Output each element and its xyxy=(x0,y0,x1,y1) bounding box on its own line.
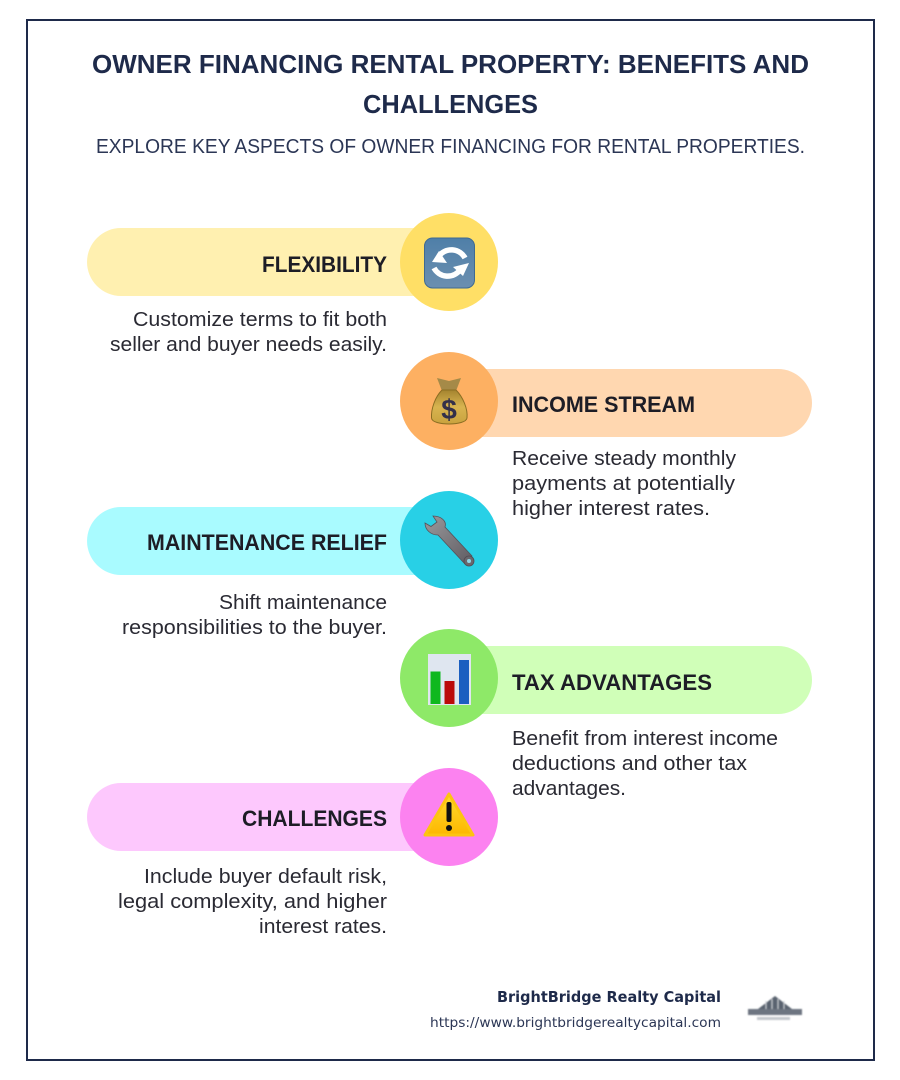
icon: money bag: $ xyxy=(441,394,457,425)
maintenance relief description: responsibilities to the buyer. xyxy=(122,617,387,639)
tax advantages description: advantages. xyxy=(512,778,626,800)
challenges description: interest rates. xyxy=(259,916,387,938)
company name: BrightBridge Realty Capital xyxy=(497,988,721,1006)
flexibility heading: FLEXIBILITY xyxy=(262,252,387,277)
income stream description: higher interest rates. xyxy=(512,498,710,520)
maintenance relief description: Shift maintenance xyxy=(219,592,387,614)
panel: flexibility xyxy=(87,213,498,356)
income stream icon circle xyxy=(400,352,498,450)
challenges heading: CHALLENGES xyxy=(242,806,387,831)
challenges description xyxy=(118,866,387,938)
tax advantages icon circle xyxy=(400,629,498,727)
flexibility description: seller and buyer needs easily. xyxy=(110,334,387,356)
flexibility pill xyxy=(87,228,449,296)
icon: arrows button xyxy=(424,238,474,288)
tax advantages description: Benefit from interest income xyxy=(512,728,778,750)
panel: income stream xyxy=(400,352,812,520)
tax advantages description xyxy=(512,728,778,800)
challenges description: Include buyer default risk, xyxy=(144,866,387,888)
title xyxy=(92,49,809,119)
footer brand xyxy=(430,988,802,1031)
flexibility description xyxy=(110,309,387,356)
title: CHALLENGES xyxy=(363,89,538,119)
income stream heading: INCOME STREAM xyxy=(512,392,695,417)
tax advantages heading: TAX ADVANTAGES xyxy=(512,670,712,695)
income stream description xyxy=(512,448,736,520)
flexibility description: Customize terms to fit both xyxy=(133,309,387,331)
company url: https://www.brightbridgerealtycapital.com xyxy=(430,1016,721,1031)
income stream description: Receive steady monthly xyxy=(512,448,736,470)
icon: bar chart xyxy=(428,654,471,705)
income stream pill xyxy=(449,369,812,437)
subtitle: EXPLORE KEY ASPECTS OF OWNER FINANCING FOR RENTAL PROPERTIES. xyxy=(96,136,805,158)
maintenance relief description xyxy=(122,592,387,639)
maintenance relief icon circle xyxy=(400,491,498,589)
panel: maintenance relief xyxy=(87,491,498,639)
challenges description: legal complexity, and higher xyxy=(118,891,387,913)
flexibility icon circle xyxy=(400,213,498,311)
title: OWNER FINANCING RENTAL PROPERTY: BENEFITS AND xyxy=(92,49,809,79)
icon: warning sign xyxy=(425,794,473,835)
maintenance relief pill xyxy=(87,507,449,575)
challenges icon circle xyxy=(400,768,498,866)
maintenance relief heading: MAINTENANCE RELIEF xyxy=(147,530,387,555)
icon: company logo xyxy=(748,996,802,1020)
icon: money bag xyxy=(431,378,467,425)
tax advantages description: deductions and other tax xyxy=(512,753,747,775)
challenges pill xyxy=(87,783,449,851)
panel: tax advantages xyxy=(400,629,812,800)
icon: wrench xyxy=(425,516,474,566)
income stream description: payments at potentially xyxy=(512,473,735,495)
panel: challenges xyxy=(87,768,498,938)
tax advantages pill xyxy=(449,646,812,714)
